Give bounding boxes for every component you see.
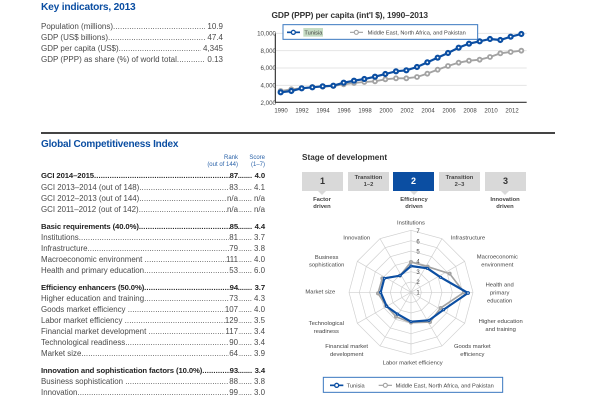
x axis labels: 1996	[337, 108, 351, 114]
row: population	[41, 22, 223, 31]
row: innovation and sophistication: Innovation and sophistication factors (10.0%)	[41, 366, 202, 375]
row: GCI 2011-2012: GCI 2011–2012 (out of 142)	[41, 205, 139, 214]
row: innovation: Innovation	[41, 388, 77, 397]
row: GCI 2014-2015: 4.0	[255, 171, 265, 180]
row: efficiency enhancers: 3.7	[255, 283, 265, 292]
row: market size: 64	[229, 349, 238, 358]
legend: Tunisia	[304, 30, 323, 36]
row: technological readiness: Technological readiness	[41, 338, 125, 347]
transition 2-3 box: Transition	[446, 175, 473, 181]
row: basic requirements: 85	[230, 222, 238, 231]
row: GDP per capita: GDP per capita (US$)	[41, 44, 119, 53]
row: goods market: 107	[225, 305, 238, 314]
transition 1-2 box: Transition	[355, 175, 382, 181]
radar axis labels: and training	[485, 327, 516, 333]
chart heading: GDP (PPP) per capita (int'l $), 1990–2013	[272, 10, 428, 20]
section rule	[41, 132, 555, 134]
row: GCI 2013-2014: 83	[229, 183, 238, 192]
transition 1-2 box	[348, 172, 389, 191]
stage 1 box: 1	[320, 176, 325, 186]
row: GCI 2013-2014: 4.1	[254, 183, 265, 192]
radar axis labels: Financial market	[325, 344, 368, 350]
row: GCI 2014-2015: 87	[230, 171, 238, 180]
row: GDP per capita	[41, 44, 223, 53]
panel: key indicators	[41, 2, 223, 64]
x axis labels: 2006	[442, 108, 456, 114]
radar scale	[416, 229, 420, 296]
y axis labels: 8,000	[261, 48, 277, 55]
row: institutions	[41, 233, 265, 242]
radar scale: 3	[416, 270, 420, 276]
row: higher education: 73	[229, 294, 238, 303]
x axis labels	[274, 108, 519, 114]
radar axis labels: Health and	[486, 283, 514, 289]
pointer 2	[410, 191, 418, 195]
row: health and primary education	[41, 266, 265, 275]
transition 2-3 box	[439, 172, 480, 191]
x axis labels: 2008	[463, 108, 477, 114]
radar axis labels: efficiency	[460, 352, 485, 358]
radar legend: Tunisia	[347, 383, 366, 389]
row: financial market: 117	[225, 327, 238, 336]
plot	[275, 25, 527, 102]
row: population: 10.9	[207, 22, 223, 31]
legend: Middle East, North Africa, and Pakistan	[368, 30, 466, 36]
y axis labels: 6,000	[261, 65, 277, 72]
row: innovation	[41, 388, 265, 397]
row: business sophistication: Business sophistication	[41, 377, 123, 386]
column header: rank: Rank	[224, 155, 238, 161]
column header: score: (1–7)	[251, 162, 265, 168]
radar axis labels: Goods market	[454, 344, 491, 350]
radar series: Tunisia	[380, 265, 469, 323]
label: factor driven	[313, 197, 331, 210]
heading: stage of development: Stage of development	[302, 153, 387, 162]
row: GCI 2014-2015: GCI 2014–2015	[41, 171, 94, 180]
row: macroeconomic environment	[41, 255, 265, 264]
row: institutions: 3.7	[254, 233, 265, 242]
row: business sophistication: 3.8	[254, 377, 265, 386]
line chart: GDP per capita	[257, 10, 527, 114]
row: population: Population (millions)	[41, 22, 113, 31]
row: GCI 2011-2012	[41, 205, 265, 214]
radar axis labels: Institutions	[397, 221, 425, 227]
y axis labels	[257, 30, 277, 107]
x axis labels: 2010	[484, 108, 498, 114]
radar axis labels: development	[330, 352, 364, 358]
row: GDP: 47.4	[207, 33, 223, 42]
row: GDP	[41, 33, 223, 42]
panel: stage of development	[302, 153, 526, 210]
label: efficiency driven: driven	[405, 204, 423, 210]
row: health and primary education: 53	[229, 266, 238, 275]
row: efficiency enhancers: 94	[230, 283, 238, 292]
radar legend: Middle East, North Africa, and Pakistan	[396, 383, 494, 389]
row: GCI 2011-2012: n/a	[254, 205, 265, 214]
radar axis labels: Macroeconomic	[477, 254, 518, 260]
x axis labels: 2004	[421, 108, 435, 114]
row: infrastructure: 79	[229, 244, 238, 253]
row: goods market	[41, 305, 265, 314]
row: technological readiness: 90	[229, 338, 238, 347]
row: health and primary education: Health and primary education	[41, 266, 144, 275]
row: business sophistication	[41, 377, 265, 386]
radar series: comparison	[377, 261, 465, 324]
row: GCI 2014-2015	[41, 171, 265, 180]
x axis labels: 2002	[400, 108, 414, 114]
row: financial market: 3.4	[254, 327, 265, 336]
series: comparison	[279, 49, 523, 93]
radar axis labels: Infrastructure	[451, 235, 485, 241]
radar axis labels: Higher education	[479, 319, 523, 325]
row: market size: Market size	[41, 349, 81, 358]
x axis labels: 2000	[379, 108, 393, 114]
column header: score: Score	[249, 155, 265, 161]
row: financial market: Financial market development	[41, 327, 146, 336]
row: GDP per capita: 4,345	[203, 44, 223, 53]
radar axis labels: readiness	[314, 329, 339, 335]
row: higher education	[41, 294, 265, 303]
stage 3 box	[485, 172, 526, 191]
row: goods market: 4.0	[254, 305, 265, 314]
row: macroeconomic environment: 111	[226, 255, 238, 264]
y axis labels: 2,000	[261, 100, 277, 107]
label: factor driven: Factor	[313, 197, 331, 203]
radar axis labels: Business	[315, 255, 339, 261]
row: market size: 3.9	[254, 349, 265, 358]
row: basic requirements: 4.4	[255, 222, 265, 231]
radar chart	[305, 220, 523, 393]
row: GDP: GDP (US$ billions)	[41, 33, 108, 42]
radar axis labels: Market size	[305, 290, 335, 296]
row: business sophistication: 88	[229, 377, 238, 386]
transition 1-2 box: 1–2	[364, 182, 373, 188]
x axis labels: 1992	[295, 108, 309, 114]
row: goods market: Goods market efficiency	[41, 305, 126, 314]
label: factor driven: driven	[313, 204, 331, 210]
heading: key indicators: Key indicators, 2013	[41, 2, 136, 13]
row: labor market: 129	[225, 316, 238, 325]
row: GCI 2011-2012: n/a	[227, 205, 238, 214]
heading: GCI: Global Competitiveness Index	[41, 139, 178, 150]
row: innovation: 3.0	[254, 388, 265, 397]
pointer 1	[318, 191, 326, 195]
label: efficiency driven: Efficiency	[400, 197, 428, 203]
column header: score	[249, 154, 265, 168]
row: infrastructure: 3.8	[254, 244, 265, 253]
column header: rank	[207, 154, 238, 168]
label: innovation driven: driven	[496, 204, 514, 210]
radar scale: 4	[416, 260, 420, 266]
series: Tunisia	[279, 32, 523, 94]
stage 2 box	[393, 172, 434, 191]
row: labor market: Labor market efficiency	[41, 316, 122, 325]
label: efficiency driven	[400, 197, 428, 210]
row: GCI 2012-2013: n/a	[254, 194, 265, 203]
row: basic requirements: Basic requirements (40.0%)	[41, 222, 139, 231]
radar axis labels: Innovation	[343, 235, 370, 241]
radar axis labels: environment	[481, 262, 514, 268]
row: GDP share: 0.13	[207, 55, 223, 64]
x axis labels: 2012	[505, 108, 519, 114]
row: labor market: 3.5	[254, 316, 265, 325]
row: basic requirements	[41, 222, 266, 231]
row: innovation and sophistication: 93	[230, 366, 238, 375]
label: innovation driven	[490, 197, 520, 210]
row: macroeconomic environment: 4.0	[254, 255, 265, 264]
x axis labels: 1994	[316, 108, 330, 114]
legend	[283, 25, 478, 39]
row: innovation: 99	[229, 388, 238, 397]
row: efficiency enhancers	[41, 283, 265, 292]
row: macroeconomic environment: Macroeconomic environment	[41, 255, 142, 264]
x axis labels: 1990	[274, 108, 288, 114]
row: GCI 2012-2013: GCI 2012–2013 (out of 144)	[41, 194, 139, 203]
row: GCI 2013-2014: GCI 2013–2014 (out of 148)	[41, 183, 139, 192]
row: higher education: Higher education and training	[41, 294, 144, 303]
radar axis labels: sophistication	[309, 263, 344, 269]
row: market size	[41, 349, 265, 358]
row: institutions: Institutions	[41, 233, 79, 242]
row: GCI 2013-2014	[41, 183, 265, 192]
y axis labels: 4,000	[261, 82, 277, 90]
stage 3 box: 3	[503, 176, 508, 186]
row: higher education: 4.3	[254, 294, 265, 303]
stage 1 box	[302, 172, 343, 191]
stage 2 box: 2	[411, 176, 416, 186]
radar axis labels: primary	[490, 291, 509, 297]
radar axis labels: education	[487, 299, 512, 305]
row: infrastructure	[41, 244, 265, 253]
radar grid	[349, 230, 473, 354]
radar axis labels: Technological	[309, 321, 344, 327]
row: technological readiness: 3.4	[254, 338, 265, 347]
radar axis labels	[305, 221, 523, 366]
row: GCI 2012-2013: n/a	[227, 194, 238, 203]
row: institutions: 81	[229, 233, 238, 242]
pointer 3	[501, 191, 509, 195]
row: infrastructure: Infrastructure	[41, 244, 88, 253]
radar axis labels: Labor market efficiency	[383, 360, 443, 366]
radar legend	[323, 377, 503, 392]
column header: rank: (out of 144)	[207, 162, 238, 168]
row: technological readiness	[41, 338, 265, 347]
label: innovation driven: Innovation	[490, 197, 520, 203]
row: financial market	[41, 327, 265, 336]
y axis labels: 10,000	[257, 30, 277, 38]
radar scale: 1	[416, 290, 420, 296]
radar scale: 2	[416, 280, 420, 286]
row: GDP share: GDP (PPP) as share (%) of world total	[41, 55, 177, 64]
x axis labels: 1998	[358, 108, 372, 114]
row: GCI 2012-2013	[41, 194, 265, 203]
row: efficiency enhancers: Efficiency enhancers (50.0%)	[41, 283, 144, 292]
row: innovation and sophistication: 3.4	[255, 366, 265, 375]
radar scale: 7	[416, 229, 420, 235]
radar scale: 5	[416, 250, 420, 256]
radar scale: 6	[416, 239, 420, 245]
panel: global competitiveness index	[41, 139, 266, 397]
row: health and primary education: 6.0	[254, 266, 265, 275]
row: labor market	[41, 316, 265, 325]
transition 2-3 box: 2–3	[455, 182, 464, 188]
